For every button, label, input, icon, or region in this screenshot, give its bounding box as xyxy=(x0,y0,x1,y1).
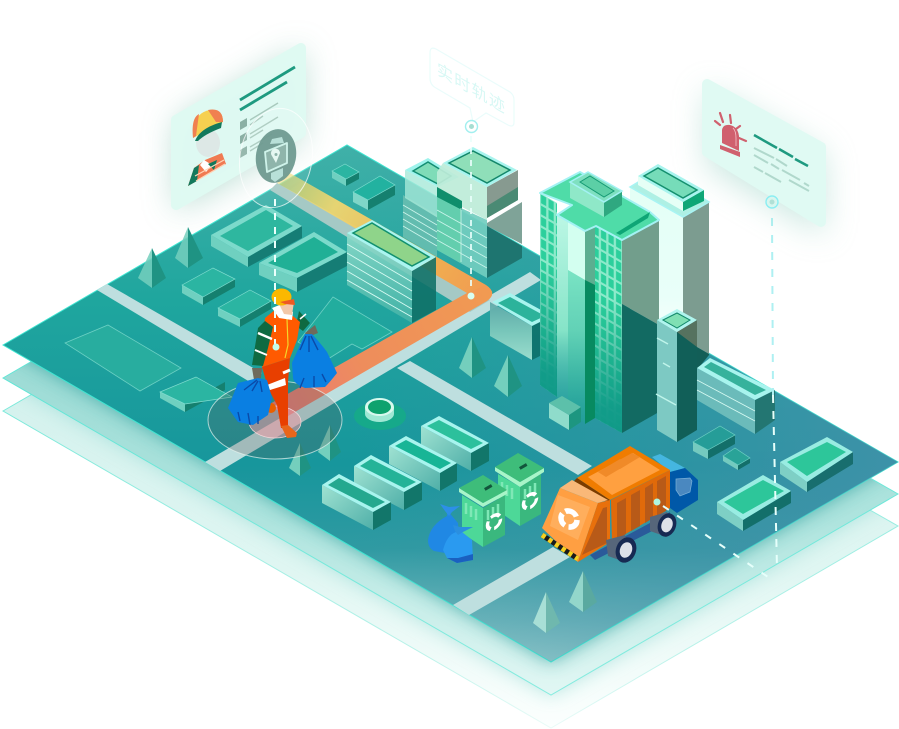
pyramid trees xyxy=(138,227,597,633)
tree xyxy=(546,592,560,633)
block xyxy=(780,437,853,492)
chassis xyxy=(590,512,670,560)
bullets xyxy=(240,118,247,158)
worker info card xyxy=(175,48,303,212)
tag text: 实时轨迹 xyxy=(437,59,506,118)
face xyxy=(279,302,294,315)
cab front xyxy=(670,468,698,513)
white tower xyxy=(630,164,709,387)
block xyxy=(717,475,791,531)
outer ring xyxy=(232,103,320,213)
third ground plate xyxy=(2,394,899,728)
near arm xyxy=(252,321,273,366)
card body xyxy=(176,48,301,205)
watch straps xyxy=(270,137,284,144)
tree xyxy=(494,355,508,397)
row block 1 xyxy=(322,474,391,530)
row block 4 xyxy=(421,416,489,471)
detail lines xyxy=(250,103,278,151)
flat ground pads xyxy=(65,297,392,391)
main green tower xyxy=(540,172,659,433)
avatar xyxy=(188,110,226,186)
tree xyxy=(138,248,152,288)
right bag xyxy=(292,334,337,388)
block xyxy=(211,205,302,267)
far arm xyxy=(296,311,310,331)
tree xyxy=(583,571,597,612)
collar xyxy=(272,304,293,320)
green recycling bins xyxy=(459,453,544,547)
block xyxy=(259,232,347,292)
second ground plate xyxy=(2,362,899,696)
shoe xyxy=(281,425,297,438)
blue garbage bags xyxy=(428,504,473,563)
watch face xyxy=(265,143,287,172)
cab top xyxy=(652,454,685,472)
low block group, left xyxy=(160,164,395,412)
alert card xyxy=(706,84,824,235)
rear wheel xyxy=(606,534,640,566)
garbage truck xyxy=(542,446,698,566)
front bin xyxy=(459,475,507,547)
base xyxy=(720,145,740,157)
disc xyxy=(252,126,300,186)
back bin xyxy=(495,453,544,526)
tree xyxy=(152,248,166,288)
block xyxy=(182,268,235,305)
rays xyxy=(715,113,746,141)
tree xyxy=(330,425,341,461)
trail tag node xyxy=(466,120,478,132)
block xyxy=(332,164,359,186)
block xyxy=(693,426,735,459)
rear inner panel xyxy=(550,495,590,540)
block xyxy=(353,176,395,210)
tree xyxy=(569,571,583,612)
hands xyxy=(252,368,262,380)
dome xyxy=(722,125,739,151)
tree xyxy=(188,227,203,268)
siren icon xyxy=(715,113,746,157)
block xyxy=(160,377,232,412)
dashed tracking lines xyxy=(275,136,777,577)
alert card node xyxy=(766,196,778,208)
row block 3 xyxy=(389,436,457,491)
rear panel xyxy=(542,488,598,562)
row of four low buildings xyxy=(322,416,489,530)
jacket xyxy=(262,309,300,367)
tree xyxy=(175,227,188,268)
tree xyxy=(472,337,486,378)
sanitation worker xyxy=(228,288,337,438)
pin xyxy=(271,149,280,163)
alert card line on plate xyxy=(773,395,777,568)
golden tracking route xyxy=(268,172,492,416)
worker line xyxy=(274,199,276,345)
shoe back xyxy=(266,403,276,413)
cab window xyxy=(676,478,692,496)
tree xyxy=(318,425,330,461)
top ground plate xyxy=(3,145,898,662)
tree xyxy=(289,443,300,476)
location ring around worker xyxy=(208,381,342,459)
card shadow xyxy=(706,88,824,235)
detail dashes xyxy=(754,148,809,191)
small slim tower xyxy=(656,309,697,442)
truck line xyxy=(663,506,768,577)
block xyxy=(723,448,750,470)
tree xyxy=(300,443,311,476)
smartwatch icon xyxy=(232,103,320,213)
cube by tower xyxy=(549,396,581,430)
left bag xyxy=(228,378,272,425)
route nodes xyxy=(272,292,660,506)
building: striped block on route xyxy=(347,220,436,323)
heading lines xyxy=(240,67,295,110)
building: block beside towers xyxy=(490,293,552,360)
pants xyxy=(262,358,290,428)
row block 2 xyxy=(354,455,422,510)
heading dashes xyxy=(754,135,808,166)
block xyxy=(218,290,271,327)
box top xyxy=(577,446,670,500)
tree xyxy=(459,337,472,378)
card body xyxy=(707,84,821,222)
front wheel xyxy=(650,511,680,539)
hazard stripe xyxy=(542,535,578,559)
reflective stripe xyxy=(267,378,286,390)
real-time track speech tag xyxy=(430,48,514,126)
rear side xyxy=(578,500,610,562)
alert card line xyxy=(772,218,773,395)
roads xyxy=(97,183,592,615)
manhole well xyxy=(354,398,406,430)
box side xyxy=(611,470,670,542)
card shadow xyxy=(175,48,303,212)
block right of towers xyxy=(697,358,775,434)
tree xyxy=(533,592,546,633)
helmet xyxy=(272,288,292,306)
tree xyxy=(508,355,522,397)
route line, trail tag xyxy=(470,136,472,290)
building: rear glass block xyxy=(403,147,522,278)
recycle mark xyxy=(561,510,577,528)
right low blocks xyxy=(693,426,853,531)
